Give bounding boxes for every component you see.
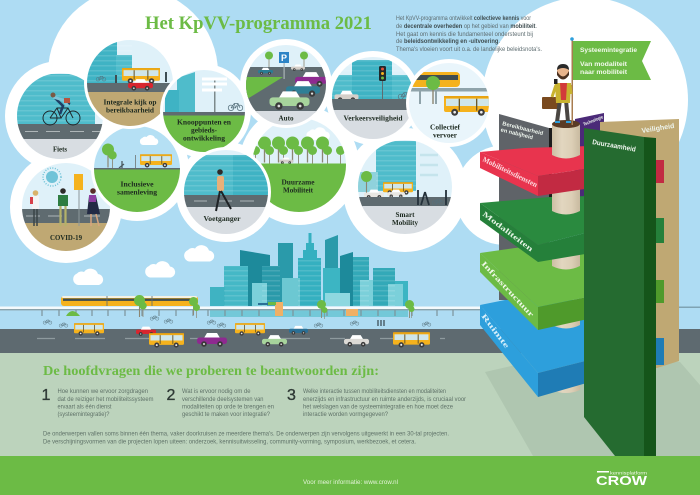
label: Auto: Auto (278, 114, 294, 122)
label: Knooppunten en gebiedsontwikkeling (177, 118, 231, 142)
panel: Duurzaamheid: Duurzaamheid (592, 139, 636, 154)
clouds (73, 245, 214, 285)
title: Het KpVV-programma 2021 (145, 13, 372, 34)
label: Integrale kijk op bereikbaarheid: Integrale kijk op (104, 98, 157, 106)
central post above blue layer (552, 305, 580, 328)
circle: Inclusieve samenleving (91, 126, 180, 212)
CROW logo (596, 470, 648, 488)
layer: Infrastructuur: Infrastructuur (480, 259, 537, 319)
central post below blue layer (552, 370, 580, 393)
label: Inclusieve samenleving: samenleving (117, 188, 158, 196)
question 1: Hoe kunnen we ervoor zorgdragen (58, 389, 148, 395)
layer: Mobiliteitsdiensten: Mobiliteitsdiensten (481, 155, 540, 189)
label: COVID-19: COVID-19 (50, 234, 82, 242)
flag (570, 37, 651, 125)
flag: Systeemintegratie (580, 47, 637, 54)
layer: Mobiliteitsdiensten (480, 146, 598, 196)
question 1 (42, 387, 154, 418)
question 3: interactie worden vormgegeven? (303, 412, 389, 418)
heading: main questions: De hoofdvragen die we proberen te beantwoorden zijn: (43, 364, 379, 379)
label: Integrale kijk op bereikbaarheid (104, 100, 156, 112)
white cloud behind theme circles (5, 0, 688, 263)
question 1: ervaart als één dienst (58, 404, 112, 410)
layer: Modaliteiten: Modaliteiten (481, 209, 536, 254)
intro text block: de decentrale overheden op het gebied van mobiliteit. (396, 24, 537, 30)
label: Duurzame Mobiliteit: Mobiliteit (283, 186, 314, 194)
panel: Bereikbaarheid en nabijheid (499, 114, 552, 300)
trees and stations along bridge (66, 295, 414, 319)
layer: Infrastructuur (480, 240, 597, 330)
intro text block: Het gaat om kennis die fundamenteel ondersteunt bij (396, 32, 533, 38)
question 1: 1 (42, 387, 50, 404)
intro text block: Het KpVV-programma ontwikkelt collectieve kennis voor (396, 16, 531, 22)
central post above lime layer (552, 245, 580, 270)
train (61, 296, 198, 306)
layer: Ruimte (479, 300, 597, 397)
label: Inclusieve samenleving: Inclusieve (120, 180, 154, 188)
question 3: het welslagen van de systeemintegratie en hoe moet deze (303, 404, 454, 410)
panel: Duurzaamheid (584, 128, 656, 456)
closing paragraph: De verschijningsvormen van die projecten lopen uiteen: onderzoek, kennisuitwisseling, community-vorming, symposium, werkbezoek, et cetera. (43, 440, 416, 446)
question 2: verschillende deelsystemen van (182, 397, 264, 403)
question 3: enerzijds en infrastructuur en ruimte anderzijds, is cruciaal voor (303, 397, 466, 403)
circle: Voetganger (181, 147, 272, 237)
label: Integrale kijk op bereikbaarheid: bereikbaarheid (106, 106, 154, 114)
panel: Veiligheid: Veiligheid (641, 123, 675, 135)
flag: Van modaliteit (580, 61, 628, 68)
flag: naar mobiliteit (580, 69, 628, 76)
question 2: modaliteiten op orde te brengen en (182, 404, 274, 410)
plate tabs right of central panel (650, 160, 664, 365)
label: Collectief vervoer (430, 124, 460, 138)
label: Smart Mobility: Smart (396, 211, 415, 219)
circle: Verkeersveiligheid (332, 57, 411, 139)
circle: Duurzame Mobiliteit (253, 120, 346, 212)
label: Knooppunten en gebiedsontwikkeling: Knooppunten en (177, 118, 231, 126)
road (0, 329, 700, 353)
shadow of structure (485, 355, 700, 456)
question 3 (287, 387, 466, 418)
lane markings (37, 338, 445, 340)
label: Fiets: Fiets (53, 146, 67, 154)
label: Voetganger: Voetganger (204, 215, 240, 223)
vehicles on road (74, 323, 430, 348)
panel: Bereikbaarheid en nabijheid: Bereikbaarheid (502, 121, 544, 137)
intro text block (396, 16, 542, 53)
panel: Veiligheid (600, 119, 679, 368)
circle: Fiets (17, 73, 103, 159)
CROW logo: CROW (596, 473, 648, 488)
layer: Modaliteiten (480, 196, 597, 262)
label: Inclusieve samenleving (117, 182, 157, 196)
circle: COVID-19 (22, 163, 110, 251)
question 1: dat de reiziger het mobiliteitssysteem (58, 397, 154, 403)
label: Smart Mobility: Mobility (392, 219, 418, 227)
panel: Technologie (575, 113, 604, 200)
city skyline (210, 233, 408, 317)
CROW logo: kennisplatform (610, 470, 647, 476)
cyclists and pedestrians (43, 316, 431, 327)
footer link text: Voor meer informatie: www.crow.nl (303, 480, 398, 486)
question 2: 2 (166, 387, 176, 404)
question 2 (166, 387, 274, 418)
question 3: Welke interactie tussen mobiliteitsdiensten en modaliteiten (303, 389, 446, 395)
panel: Bereikbaarheid en nabijheid: en nabijheid (500, 127, 533, 141)
question 2: geschikt te maken voor integratie? (182, 412, 271, 418)
label: Duurzame Mobiliteit: Duurzame (282, 178, 314, 186)
label: Smart Mobility (392, 212, 418, 226)
label: Knooppunten en gebiedsontwikkeling: ontwikkeling (183, 134, 226, 142)
label: Knooppunten en gebiedsontwikkeling: gebieds- (191, 126, 218, 134)
label: Duurzame Mobiliteit (282, 180, 314, 192)
closing paragraph (43, 432, 449, 446)
intro text block: de beleidsontwikkeling en -uitvoering. (396, 39, 500, 45)
central post above green layer (552, 185, 580, 214)
question 1: (systeemintegratie)? (58, 412, 110, 418)
pale green ground (0, 353, 700, 456)
question 2: Wat is ervoor nodig om de (182, 389, 251, 395)
circle: Integrale kijk op bereikbaarheid (84, 37, 176, 130)
elevated rail bridge (0, 306, 700, 316)
label: Collectief vervoer: Collectief (430, 124, 461, 132)
circle: Knooppunten en gebiedsontwikkeling (160, 70, 245, 152)
panel: Technologie: Technologie (583, 114, 604, 128)
label: Verkeersveiligheid: Verkeersveiligheid (344, 114, 403, 122)
circle: Collectief vervoer (406, 63, 489, 143)
circle: Auto (246, 45, 326, 128)
person with suitcase (542, 64, 571, 122)
footer band (0, 456, 700, 495)
label: Collectief vervoer: vervoer (433, 132, 457, 140)
circle: Auto: P (281, 53, 287, 63)
question 3: 3 (287, 387, 296, 404)
central post top (552, 120, 580, 158)
intro text block: Thema's vloeien voort uit o.a. de landelijke beleidsnota's. (396, 47, 542, 53)
closing paragraph: De onderwerpen vallen soms binnen één thema, vaker doorkruisen ze meerdere thema's. De onderwerpen zijn vervolgens uitgewerkt in een 30-tal projecten. (43, 432, 449, 438)
circle: Smart Mobility (358, 140, 452, 234)
layer: Ruimte: Ruimte (479, 312, 512, 351)
